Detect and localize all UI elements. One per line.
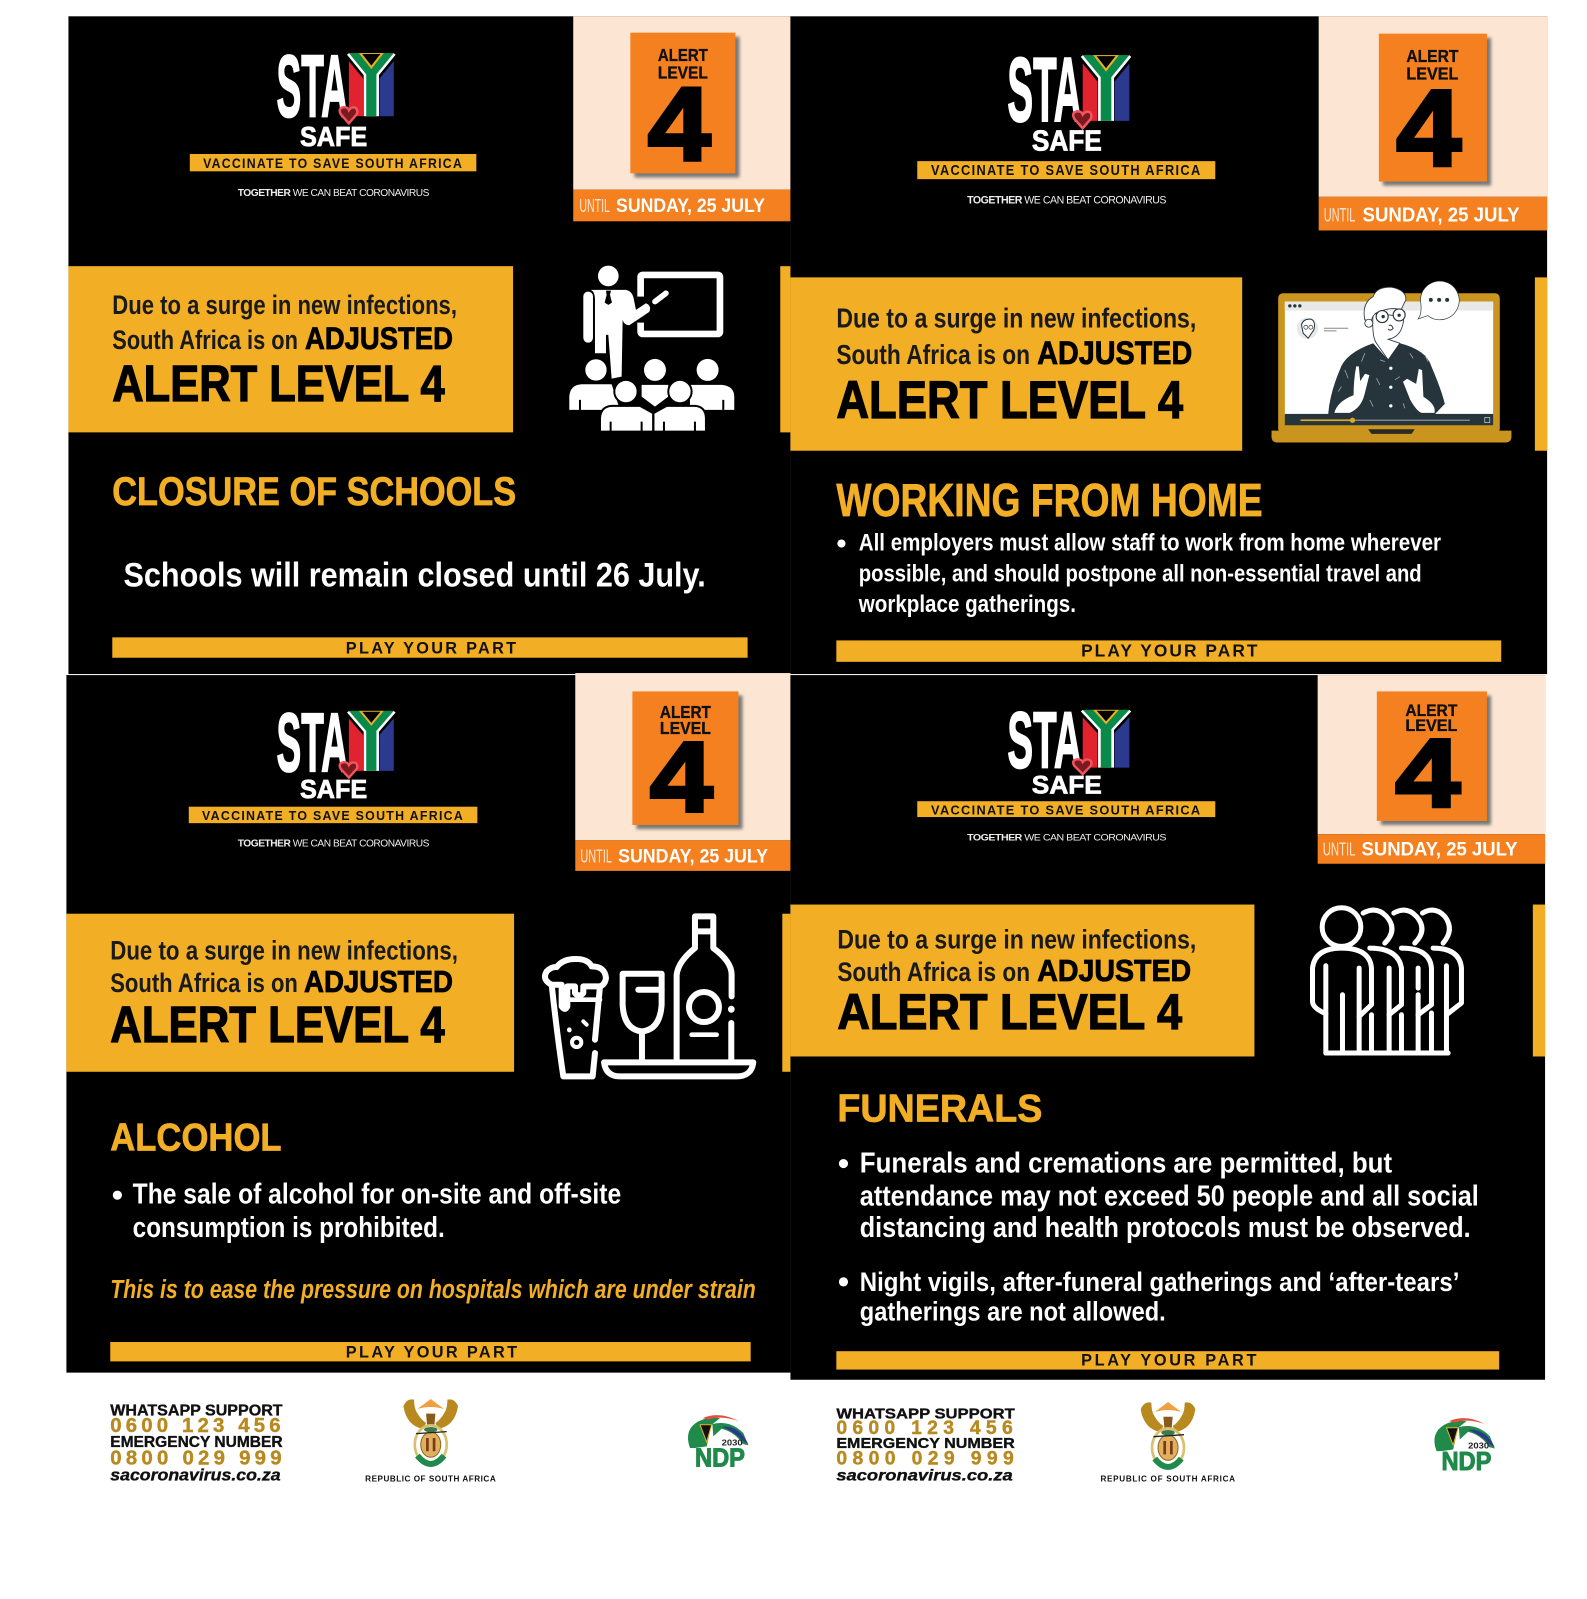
alert level badge: ALERT	[1405, 702, 1457, 720]
logo: stay safe: STA	[276, 37, 348, 135]
logo: stay safe: TOGETHER WE CAN BEAT CORONAVIRUS	[238, 839, 430, 849]
alert level badge: 4	[1395, 718, 1460, 828]
logo: stay safe: STA	[1007, 696, 1082, 785]
banner: alert level 4: ALERT LEVEL 4	[836, 371, 1183, 430]
bullet list: Funerals and cremations are permitted, but	[860, 1148, 1393, 1180]
alert level badge: SUNDAY, 25 JULY	[616, 195, 765, 217]
alert level badge: 4	[648, 66, 711, 183]
footer: left contacts: 0800 029 999	[110, 1447, 282, 1469]
banner: alert level 4: Due to a surge in new infections,	[112, 290, 457, 320]
banner: alert level 4	[782, 905, 1545, 1072]
banner: alert level 4: ALERT LEVEL 4	[110, 996, 445, 1053]
banner: alert level 4: Due to a surge in new infections,	[836, 302, 1196, 333]
banner: alert level 4: South Africa is on	[836, 339, 1030, 370]
play your part bar: PLAY YOUR PART	[1081, 1351, 1257, 1369]
footer: right contacts: 0600 123 456	[836, 1417, 1013, 1439]
alert level badge	[575, 673, 790, 871]
alert level badge	[1319, 16, 1547, 230]
logo: stay safe: SAFE	[300, 121, 367, 152]
bullet text	[113, 1178, 621, 1244]
alert level badge: SUNDAY, 25 JULY	[618, 846, 768, 868]
bullet list: workplace gatherings.	[858, 591, 1076, 618]
icon: laptop with presenter	[1272, 281, 1511, 443]
alert level badge: ALERT	[658, 45, 708, 65]
alert level badge: SUNDAY, 25 JULY	[1363, 204, 1520, 226]
icon: NDP 2030 logo: NDP	[695, 1443, 745, 1473]
banner: alert level 4: South Africa is on	[112, 325, 298, 355]
banner: alert level 4: ADJUSTED	[1037, 954, 1191, 988]
footer: left contacts: EMERGENCY NUMBER	[110, 1434, 283, 1451]
alert level badge: 4	[650, 723, 713, 834]
footer: left contacts: WHATSAPP SUPPORT	[110, 1402, 283, 1419]
logo: stay safe: TOGETHER WE CAN BEAT CORONAVIRUS	[967, 833, 1167, 843]
footer: right contacts	[836, 1407, 1015, 1485]
banner: alert level 4: ADJUSTED	[304, 965, 453, 999]
banner: alert level 4	[68, 266, 513, 432]
bullet list	[837, 530, 1441, 618]
label: republic of south africa: REPUBLIC OF SOUTH AFRICA	[365, 1475, 496, 1484]
panel: working from home	[780, 16, 1547, 674]
logo: stay safe: SAFE	[1032, 126, 1102, 158]
logo: stay safe: SAFE	[1032, 771, 1102, 799]
play your part bar	[112, 637, 748, 658]
play your part bar	[110, 1342, 751, 1361]
play your part bar	[836, 1351, 1499, 1370]
alert level badge: LEVEL	[660, 718, 711, 738]
icon: coat of arms	[1141, 1402, 1195, 1467]
alert level badge: SUNDAY, 25 JULY	[1362, 839, 1518, 861]
logo: stay safe: VACCINATE TO SAVE SOUTH AFRICA	[931, 803, 1201, 817]
logo: stay safe: SAFE	[300, 775, 367, 804]
logo: stay safe: TOGETHER WE CAN BEAT CORONAVIRUS	[967, 195, 1166, 207]
label: republic of south africa: REPUBLIC OF SOUTH AFRICA	[1100, 1475, 1235, 1484]
alert level badge: ALERT	[660, 702, 711, 722]
heading: working from home: WORKING FROM HOME	[836, 474, 1263, 526]
play your part bar: PLAY YOUR PART	[346, 1343, 517, 1361]
bullet list: All employers must allow staff to work from home wherever	[859, 530, 1441, 557]
body text: Schools will remain closed until 26 July.	[124, 556, 706, 594]
banner: alert level 4: South Africa is on	[110, 968, 298, 998]
alert level badge: UNTIL	[579, 195, 610, 216]
alert level badge: 4	[1396, 68, 1462, 190]
footer: left contacts: 0600 123 456	[110, 1415, 281, 1437]
panel: closure of schools	[68, 16, 790, 674]
icon: teacher and class	[569, 266, 734, 433]
footer: right contacts: sacoronavirus.co.za	[836, 1468, 1013, 1485]
icon: NDP 2030 logo	[1434, 1418, 1495, 1476]
banner: alert level 4: ALERT LEVEL 4	[112, 355, 445, 412]
icon: group of people	[1312, 908, 1461, 1053]
footer: right contacts: WHATSAPP SUPPORT	[836, 1407, 1015, 1423]
logo: stay safe	[917, 39, 1215, 207]
icon: NDP 2030 logo: 2030	[722, 1438, 743, 1447]
banner: alert level 4: ALERT LEVEL 4	[837, 984, 1182, 1040]
banner: alert level 4: ADJUSTED	[1037, 334, 1192, 371]
logo: stay safe: STA	[1007, 39, 1082, 141]
alert level badge: LEVEL	[658, 63, 708, 83]
logo: stay safe	[190, 37, 476, 199]
alert level badge	[1318, 675, 1545, 864]
icon: beer, wine and bottle	[545, 916, 753, 1076]
bullet list: gatherings are not allowed.	[860, 1297, 1166, 1327]
heading: closure of schools: CLOSURE OF SCHOOLS	[112, 470, 516, 514]
play your part bar: PLAY YOUR PART	[346, 640, 516, 658]
footer: left contacts	[110, 1402, 283, 1485]
alert level badge: UNTIL	[580, 846, 612, 867]
heading: alcohol: ALCOHOL	[110, 1116, 282, 1159]
logo: stay safe	[917, 696, 1215, 843]
banner: alert level 4: South Africa is on	[837, 957, 1030, 987]
logo: stay safe: STA	[276, 697, 348, 789]
play your part bar	[836, 640, 1501, 662]
logo: stay safe	[189, 697, 477, 849]
alert level badge: ALERT	[1406, 46, 1459, 66]
italic note: This is to ease the pressure on hospitals which are under strain	[110, 1276, 756, 1304]
bullet list: attendance may not exceed 50 people and all social	[860, 1180, 1479, 1212]
icon: NDP 2030 logo: 2030	[1468, 1441, 1490, 1450]
alert level badge: LEVEL	[1406, 64, 1459, 84]
bullet list: distancing and health protocols must be observed.	[860, 1212, 1471, 1244]
panel: alcohol	[66, 673, 790, 1373]
alert level badge: UNTIL	[1323, 839, 1355, 860]
footer: right contacts: EMERGENCY NUMBER	[836, 1436, 1015, 1452]
icon: NDP 2030 logo	[688, 1415, 748, 1473]
logo: stay safe: VACCINATE TO SAVE SOUTH AFRICA	[203, 156, 463, 171]
heading: funerals: FUNERALS	[837, 1088, 1042, 1131]
alert level badge: UNTIL	[1324, 204, 1356, 226]
panel: funerals	[782, 675, 1545, 1380]
banner: alert level 4	[780, 266, 1547, 451]
bullet list: Night vigils, after-funeral gatherings and ‘after-tears’	[860, 1267, 1459, 1297]
logo: stay safe: VACCINATE TO SAVE SOUTH AFRICA	[931, 163, 1201, 179]
footer: left contacts: sacoronavirus.co.za	[110, 1467, 281, 1485]
banner: alert level 4: Due to a surge in new infections,	[110, 936, 458, 966]
footer: right contacts: 0800 029 999	[836, 1447, 1014, 1469]
alert level badge	[573, 16, 790, 221]
bullet list	[839, 1148, 1479, 1327]
bullet text: The sale of alcohol for on-site and off-site	[133, 1178, 621, 1210]
banner: alert level 4	[66, 914, 514, 1072]
icon: coat of arms	[403, 1399, 458, 1464]
alert level badge: LEVEL	[1405, 717, 1457, 735]
bullet list: possible, and should postpone all non-essential travel and	[859, 560, 1422, 587]
bullet text: consumption is prohibited.	[133, 1212, 445, 1244]
play your part bar: PLAY YOUR PART	[1081, 641, 1258, 661]
banner: alert level 4: ADJUSTED	[305, 320, 453, 356]
banner: alert level 4: Due to a surge in new infections,	[837, 924, 1196, 954]
logo: stay safe: TOGETHER WE CAN BEAT CORONAVIRUS	[238, 188, 430, 199]
icon: NDP 2030 logo: NDP	[1441, 1446, 1491, 1476]
logo: stay safe: VACCINATE TO SAVE SOUTH AFRICA	[202, 809, 464, 823]
